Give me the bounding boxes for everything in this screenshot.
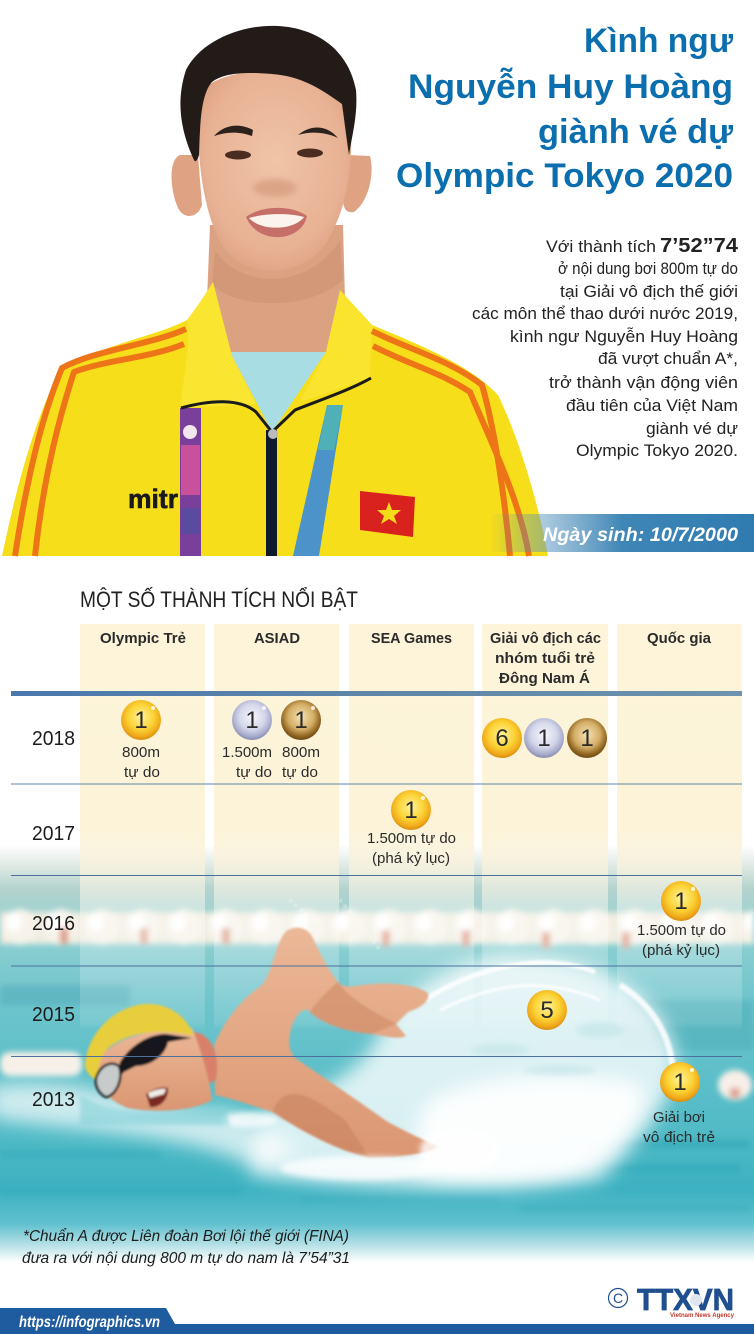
nose <box>253 179 297 197</box>
arm and torso <box>214 928 438 1158</box>
intro text block: Olympic Tokyo 2020. <box>576 442 738 460</box>
intro text block: các môn thể thao dưới nước 2019, <box>472 305 738 323</box>
2017 SEA Games: gold medal: 1.500m tự do <box>367 830 456 847</box>
zipper and collar edge <box>181 378 371 556</box>
logo: TTXVN: C <box>613 1290 623 1306</box>
2018 Olympic Trẻ: gold medal: 800m <box>122 744 160 761</box>
footer bar with url tab <box>0 1308 754 1334</box>
mouth <box>146 1087 168 1107</box>
background: swimming pool photo <box>0 845 754 1275</box>
title <box>396 22 733 195</box>
year labels: 2017 <box>32 823 75 845</box>
head <box>85 1004 217 1111</box>
footer bar with url tab: https://infographics.vn <box>19 1314 160 1331</box>
2018 ASIAD: silver medal: 1 <box>245 707 259 734</box>
2018 Đông Nam Á: medals: 1 <box>580 725 594 752</box>
intro text block: 7’52”74 <box>660 235 739 257</box>
intro text block: đã vượt chuẩn A*, <box>598 350 738 368</box>
photo: swimmer <box>0 900 676 1189</box>
2017 SEA Games: gold medal: (phá kỷ lục) <box>372 850 450 867</box>
icon: Vietnam flag <box>360 491 415 537</box>
cap <box>85 1004 194 1080</box>
2013 Quốc gia: gold medal: vô địch trẻ <box>643 1129 715 1146</box>
2018 ASIAD: silver medal <box>222 700 272 781</box>
photo: portrait of the athlete <box>2 26 548 556</box>
year labels <box>32 728 75 1111</box>
t-shirt <box>228 352 326 430</box>
intro text block <box>472 235 739 460</box>
brand logo: mitr <box>128 484 178 514</box>
face <box>198 71 351 271</box>
year labels: 2013 <box>32 1089 75 1111</box>
lanyard: blue <box>293 405 343 556</box>
intro text block: kình ngư Nguyễn Huy Hoàng <box>510 327 738 346</box>
title: Nguyễn Huy Hoàng <box>408 68 733 106</box>
splash over arm <box>222 1112 500 1180</box>
lane rope: near <box>0 1052 752 1100</box>
date of birth band: Ngày sinh: 10/7/2000 <box>543 525 738 546</box>
2017 SEA Games: gold medal: 1 <box>404 797 418 824</box>
2018 Đông Nam Á: medals <box>482 718 607 758</box>
section heading: MỘT SỐ THÀNH TÍCH NỔI BẬT <box>80 586 358 612</box>
2018 Đông Nam Á: medals: 1 <box>537 725 551 752</box>
2018 ASIAD: bronze medal <box>281 700 321 781</box>
eyebrows and eyes <box>214 126 338 160</box>
title: Olympic Tokyo 2020 <box>396 157 733 195</box>
2018 Olympic Trẻ: gold medal: 1 <box>134 707 148 734</box>
2018 ASIAD: silver medal: 1.500m <box>222 744 272 761</box>
column headers: Quốc gia <box>647 630 712 647</box>
2015 Đông Nam Á: gold medal <box>527 990 567 1030</box>
column headers: nhóm tuổi trẻ <box>495 650 595 667</box>
2016 Quốc gia: gold medal: 1.500m tự do <box>637 922 726 939</box>
logo: TTXVN: TTXVN <box>637 1282 734 1317</box>
2018 ASIAD: bronze medal: 800m <box>282 744 320 761</box>
title: giành vé dự <box>538 113 733 151</box>
date of birth band <box>490 514 754 552</box>
2016 Quốc gia: gold medal: 1 <box>674 888 688 915</box>
lane rope: far <box>0 907 754 948</box>
intro text block: tại Giải vô địch thế giới <box>560 283 738 301</box>
footnote: đưa ra với nội dung 800 m tự do nam là 7’54”31 <box>22 1250 350 1267</box>
jacket <box>2 282 548 556</box>
intro text block: đầu tiên của Việt Nam <box>566 397 738 415</box>
2016 Quốc gia: gold medal <box>637 881 726 959</box>
column headers: SEA Games <box>371 630 452 647</box>
neck <box>207 225 345 365</box>
2015 Đông Nam Á: gold medal: 5 <box>540 997 554 1024</box>
intro text block: giành vé dự <box>646 420 738 438</box>
mottled foam <box>470 1022 624 1075</box>
column headers <box>100 630 712 687</box>
2013 Quốc gia: gold medal: Giải bơi <box>653 1109 705 1126</box>
column headers: Olympic Trẻ <box>100 630 186 647</box>
intro text block: Với thành tích <box>546 238 656 256</box>
title: Kình ngư <box>584 22 733 60</box>
2013 Quốc gia: gold medal <box>643 1062 715 1146</box>
2018 Olympic Trẻ: gold medal <box>121 700 161 781</box>
hair <box>180 26 356 161</box>
2017 SEA Games: gold medal <box>367 790 456 867</box>
goggles <box>118 1034 192 1078</box>
footnote: *Chuẩn A được Liên đoàn Bơi lội thế giới (FINA) <box>23 1227 349 1245</box>
column headers: Giải vô địch các <box>490 630 601 647</box>
2016 Quốc gia: gold medal: (phá kỷ lục) <box>642 942 720 959</box>
lanyard: purple <box>180 408 201 556</box>
footnote <box>22 1227 350 1267</box>
intro text block: trở thành vận động viên <box>549 374 738 392</box>
column headers: Đông Nam Á <box>499 670 590 687</box>
year labels: 2016 <box>32 913 75 935</box>
splash <box>0 955 676 1189</box>
2018 ASIAD: silver medal: tự do <box>236 764 272 781</box>
water over chin <box>80 1095 230 1125</box>
orange sleeve stripes <box>15 329 529 556</box>
2018 Đông Nam Á: medals: 6 <box>495 725 509 752</box>
logo: TTXVN: Vietnam News Agency <box>670 1312 734 1319</box>
year labels: 2018 <box>32 728 75 750</box>
2013 Quốc gia: gold medal: 1 <box>673 1069 687 1096</box>
2018 ASIAD: bronze medal: tự do <box>282 764 318 781</box>
intro text block: ở nội dung bơi 800m tự do <box>558 260 738 278</box>
table column backgrounds <box>80 624 742 1030</box>
column headers: ASIAD <box>254 630 300 647</box>
smile <box>246 208 307 237</box>
row divider lines <box>11 691 742 1057</box>
year labels: 2015 <box>32 1004 75 1026</box>
ears <box>172 155 372 216</box>
2018 Olympic Trẻ: gold medal: tự do <box>124 764 160 781</box>
2018 ASIAD: bronze medal: 1 <box>294 707 308 734</box>
